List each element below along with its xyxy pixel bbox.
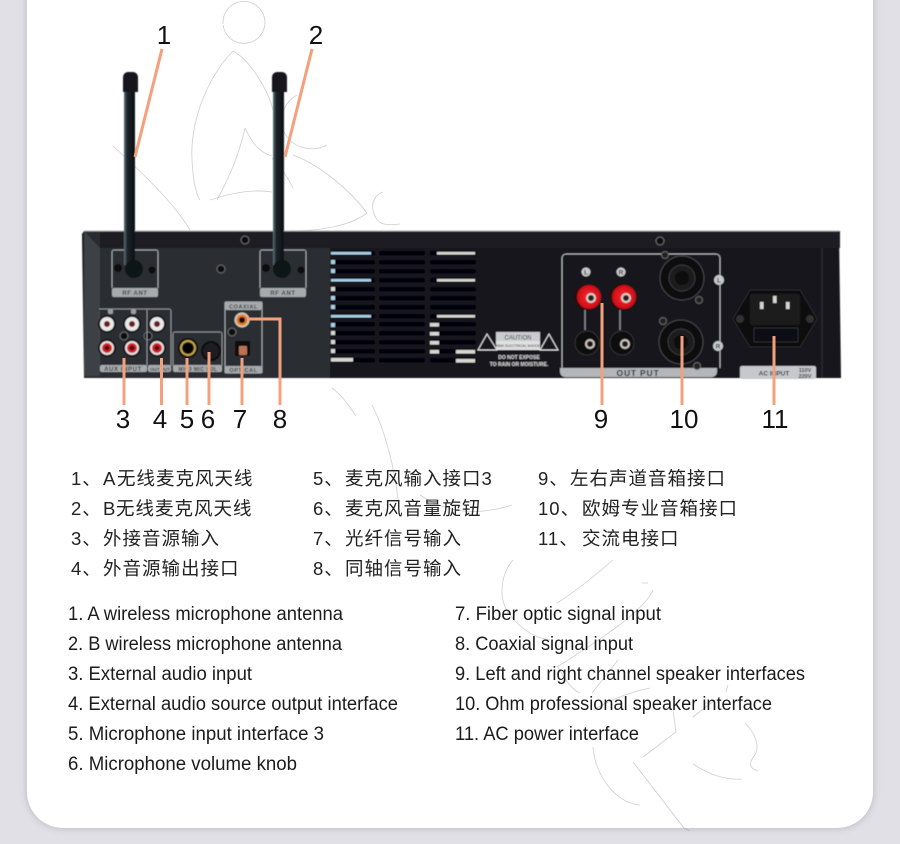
Chinese legend: 麦克风音量旋钮 [345, 498, 482, 519]
Chinese legend: B [103, 498, 116, 519]
sketch watermark [113, 1, 758, 831]
English legend left: 2. B wireless microphone antenna [68, 634, 342, 655]
RCA jacks [98, 315, 166, 357]
antenna 2 [262, 72, 304, 278]
output panel: R [619, 270, 624, 276]
caution label [478, 332, 558, 368]
microphone section [173, 332, 222, 373]
caution label: RISK ELECTRICAL SHOCK [496, 344, 541, 348]
AC power inlet: 220V [799, 374, 812, 380]
coaxial and optical section: COAXIAL [229, 304, 258, 310]
output panel: L [717, 278, 721, 284]
Chinese legend: 无线麦克风天线 [116, 498, 253, 519]
speakon connectors [659, 252, 704, 370]
screws [120, 236, 664, 340]
AC power inlet [733, 290, 817, 380]
Chinese legend: 无线麦克风天线 [117, 468, 254, 489]
output panel: R [716, 344, 721, 350]
Chinese legend: 4、 [71, 558, 102, 579]
English legend left [68, 604, 398, 775]
callout numbers: 11 [762, 404, 788, 434]
English legend left: 1. A wireless microphone antenna [68, 604, 343, 625]
English legend left: 6. Microphone volume knob [68, 754, 297, 775]
RF ANT panels: RF ANT [270, 291, 296, 297]
Chinese legend: 麦克风输入接口3 [345, 468, 493, 489]
callout numbers: 4 [153, 404, 167, 434]
AC power inlet: AC INPUT [759, 370, 789, 378]
English legend right: 10. Ohm professional speaker interface [455, 694, 772, 715]
Chinese legend: 1、 [71, 468, 102, 489]
caution label: TO RAIN OR MOISTURE. [490, 362, 549, 368]
Chinese legend: 外音源输出接口 [103, 558, 240, 579]
callout numbers: 10 [670, 404, 698, 434]
Chinese legend: 左右声道音箱接口 [570, 468, 726, 489]
caution label: DO NOT EXPOSE [498, 355, 540, 361]
Chinese legend: A [103, 468, 116, 489]
caution label: CAUTION [504, 336, 532, 342]
Chinese legend: 2、 [71, 498, 102, 519]
callout numbers: 5 [180, 404, 194, 434]
English legend right: 7. Fiber optic signal input [455, 604, 662, 625]
RF ANT panels [112, 250, 306, 297]
English legend right: 8. Coaxial signal input [455, 634, 634, 655]
output panel: L [584, 270, 588, 276]
callout numbers: 2 [309, 20, 323, 50]
callout lines [124, 49, 774, 405]
amplifier rear panel [82, 72, 841, 380]
English legend right [455, 604, 805, 745]
English legend left: 5. Microphone input interface 3 [68, 724, 324, 745]
chassis [82, 231, 841, 378]
RF ANT panels: RF ANT [122, 291, 148, 297]
ventilation slots [331, 251, 476, 362]
output panel [560, 254, 724, 378]
antenna 1 [114, 72, 156, 278]
callout numbers: 7 [233, 404, 247, 434]
binding posts [574, 284, 636, 355]
Chinese legend: 欧姆专业音箱接口 [582, 498, 738, 519]
Chinese legend [71, 468, 738, 579]
Chinese legend: 8、 [313, 558, 344, 579]
Chinese legend: 7、 [313, 528, 344, 549]
Chinese legend: 5、 [313, 468, 344, 489]
callout numbers [116, 20, 788, 434]
Chinese legend: 6、 [313, 498, 344, 519]
Chinese legend: 11、 [538, 528, 579, 549]
microphone section: MIC3 MIC VOL [179, 367, 217, 373]
English legend right: 9. Left and right channel speaker interfaces [455, 664, 805, 685]
RCA audio panels: OUT PUT [150, 367, 170, 372]
RCA audio panels: AUX INPUT [104, 367, 142, 373]
Chinese legend: 9、 [538, 468, 569, 489]
English legend left: 3. External audio input [68, 664, 253, 685]
Chinese legend: 10、 [538, 498, 580, 519]
Chinese legend: 交流电接口 [582, 528, 680, 549]
coaxial and optical section [225, 302, 262, 374]
output panel: OUT PUT [617, 368, 659, 378]
callout numbers: 9 [594, 404, 608, 434]
callout numbers: 8 [273, 404, 287, 434]
callout numbers: 1 [157, 20, 171, 50]
callout numbers: 6 [201, 404, 215, 434]
RCA audio panels [99, 309, 171, 373]
AC power inlet: 110V [799, 368, 812, 374]
Chinese legend: 光纤信号输入 [345, 528, 462, 549]
Chinese legend: 同轴信号输入 [345, 558, 462, 579]
coaxial and optical section: OPTICAL [229, 368, 258, 374]
English legend left: 4. External audio source output interface [68, 694, 398, 715]
English legend right: 11. AC power interface [455, 724, 639, 745]
Chinese legend: 外接音源输入 [103, 528, 220, 549]
Chinese legend: 3、 [71, 528, 102, 549]
callout numbers: 3 [116, 404, 130, 434]
